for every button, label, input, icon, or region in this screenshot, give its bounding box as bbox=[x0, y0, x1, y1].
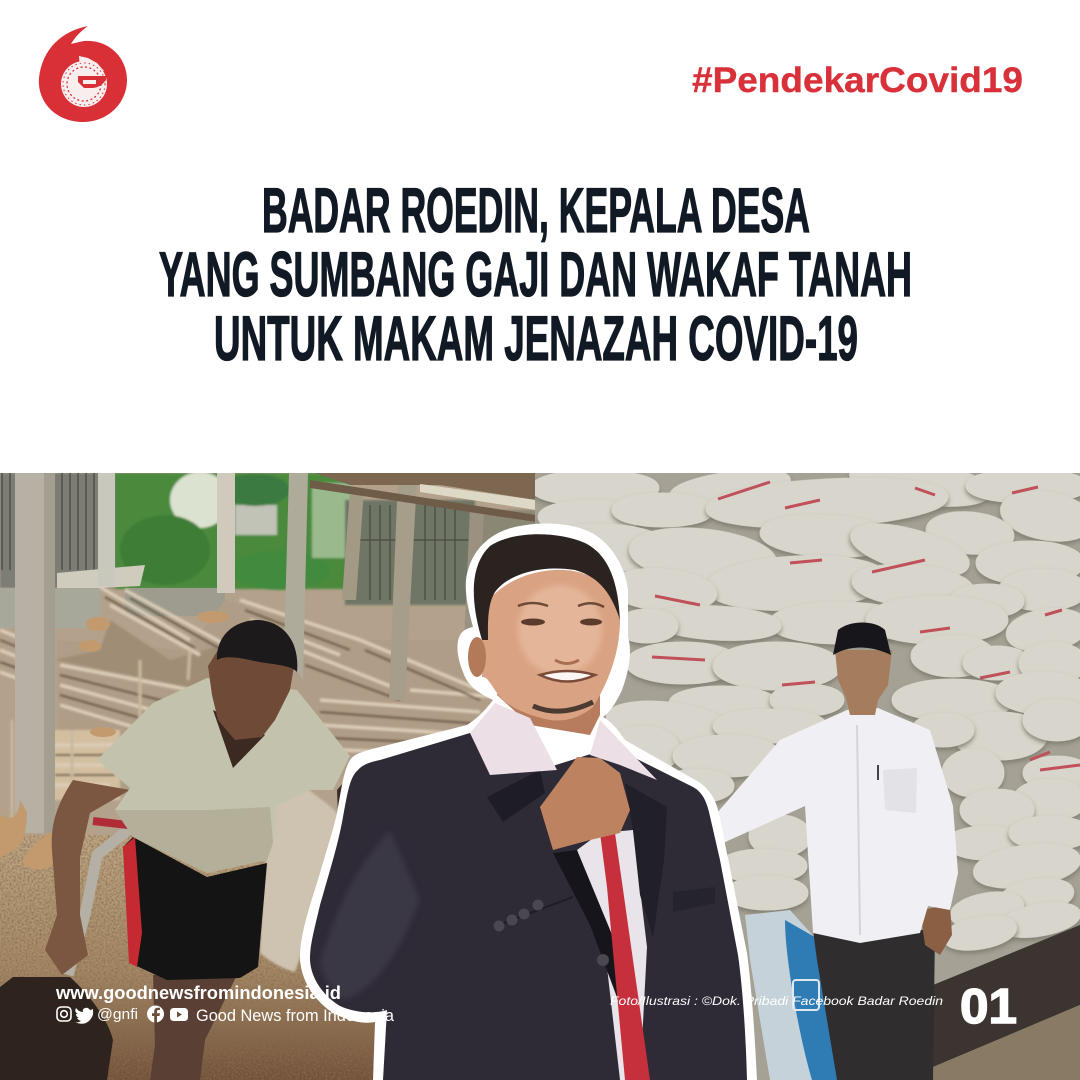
foliage and background buildings bbox=[0, 472, 536, 620]
footer: website and social handles: @gnfi bbox=[97, 1006, 138, 1023]
right lapel shadow bbox=[625, 783, 667, 937]
head bbox=[835, 650, 892, 715]
neck V bbox=[213, 710, 265, 768]
footer: website and social handles: Good News from Indonesia bbox=[196, 1006, 395, 1025]
head bbox=[208, 650, 295, 740]
ducks bbox=[0, 611, 229, 869]
sleeve highlight bbox=[320, 830, 420, 1000]
photo credit: Foto/Ilustrasi : ©Dok. Pribadi Facebook Badar Roedin bbox=[610, 994, 943, 1008]
icon: instagram bbox=[57, 1007, 71, 1021]
logo emblem: white eagle G bbox=[61, 56, 107, 107]
goatee bbox=[533, 702, 593, 711]
central portrait: man in suit with white sticker outline bbox=[300, 524, 757, 1080]
eyes bbox=[518, 603, 604, 626]
shovel red grip bbox=[93, 821, 128, 825]
barn roof beams bbox=[310, 473, 536, 522]
jacket pocket bbox=[673, 887, 715, 912]
nose bbox=[555, 660, 579, 664]
trousers bbox=[813, 930, 935, 1080]
sleeve buttons bbox=[494, 900, 609, 966]
footer: website and social handles bbox=[55, 983, 395, 1025]
icon: twitter bbox=[75, 1008, 93, 1024]
hand bbox=[922, 908, 952, 955]
dark soil mound bbox=[0, 977, 113, 1080]
logo: GNFI red swirl bbox=[39, 26, 127, 122]
white cut-out outline bbox=[300, 524, 757, 1080]
shovel shaft bbox=[68, 830, 128, 975]
ear bbox=[468, 637, 486, 677]
shorts red stripe bbox=[123, 837, 142, 967]
footer: website and social handles: www.goodnewsfromindonesia.id bbox=[55, 983, 341, 1003]
shirt bbox=[97, 678, 350, 873]
icon: youtube bbox=[170, 1008, 188, 1021]
leg bbox=[150, 975, 237, 1080]
icon: facebook bbox=[147, 1006, 164, 1023]
face bbox=[482, 570, 620, 720]
shorts bbox=[123, 837, 267, 980]
barn pillars bbox=[15, 473, 484, 833]
dark floor step bbox=[933, 925, 1080, 1067]
hair bbox=[217, 620, 297, 672]
bamboo slats bbox=[0, 587, 536, 820]
tie bbox=[600, 833, 650, 1080]
slatted fence bbox=[0, 565, 225, 628]
shirt bbox=[717, 708, 958, 943]
neck bbox=[497, 680, 600, 735]
shirt front bbox=[577, 830, 647, 1080]
hashtag: #PendekarCovid19 bbox=[692, 61, 1023, 100]
panel: right photo, rice sack stack bbox=[535, 457, 1080, 1080]
floor bbox=[0, 835, 375, 1080]
smile bbox=[540, 671, 595, 682]
shirt collar bbox=[470, 703, 657, 780]
panel: left photo, farmer in duck barn bbox=[0, 472, 536, 1080]
hair bbox=[474, 534, 620, 640]
title bbox=[159, 176, 912, 374]
blue bag bbox=[745, 910, 845, 1080]
black cap bbox=[833, 622, 891, 655]
feed sack bbox=[260, 783, 340, 972]
suit jacket bbox=[310, 733, 747, 1080]
stacked sacks bbox=[535, 457, 1080, 951]
page number: 01 bbox=[960, 980, 1017, 1034]
left lapel bbox=[487, 770, 545, 822]
man in white shirt bbox=[717, 622, 958, 1080]
sack stitching marks bbox=[652, 482, 1080, 770]
fist bbox=[540, 757, 630, 850]
sleeve cuff edge bbox=[493, 897, 573, 927]
right arm bbox=[337, 784, 342, 810]
farmer bbox=[45, 620, 358, 1080]
background bamboo mesh bbox=[2, 473, 470, 600]
inner dark lapel bbox=[553, 850, 618, 1000]
arm bbox=[45, 780, 130, 975]
